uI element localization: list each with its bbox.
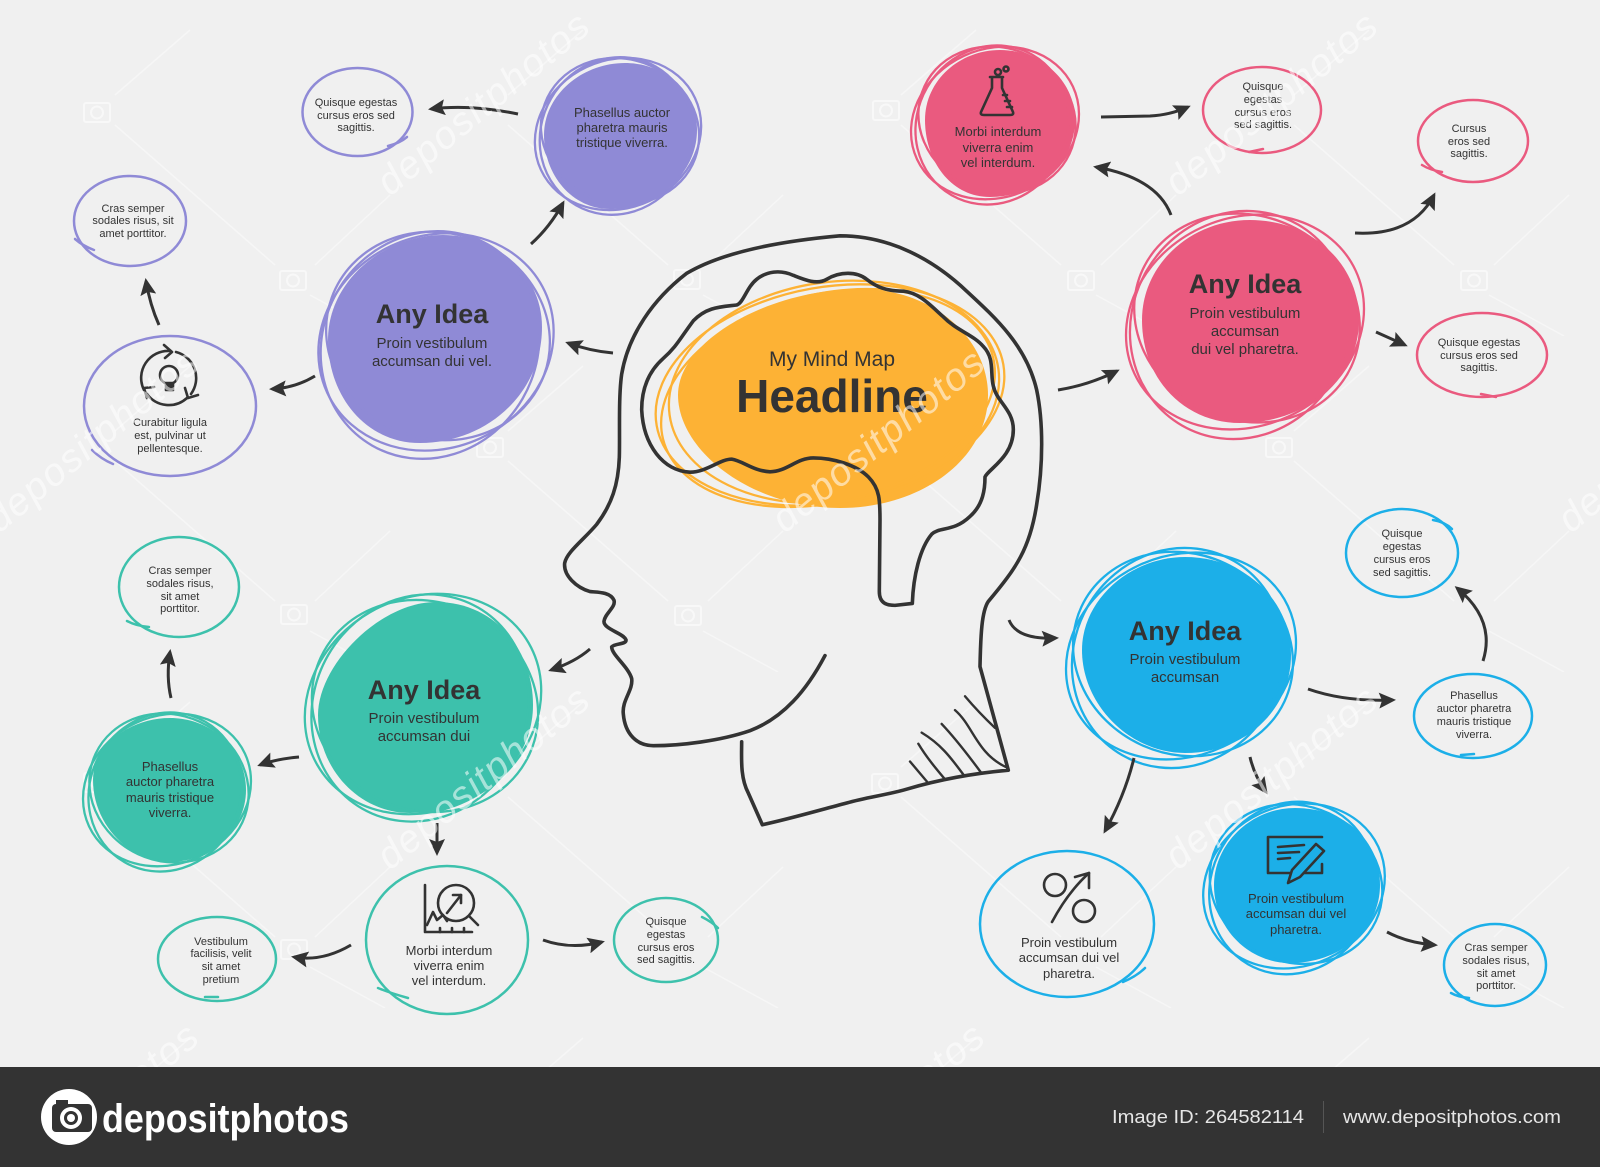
node: Morbi ring with chart icon	[366, 866, 528, 1014]
node: Phasellus filled	[58, 684, 276, 900]
node: Morbi filled with flask: vel interdum.	[961, 155, 1035, 170]
node: Quisque ring	[1203, 67, 1321, 153]
node: Cursus ring: eros sed	[1448, 136, 1490, 148]
arrow: teal idea to Phasellus	[260, 757, 299, 765]
head outline illustration	[565, 236, 1042, 825]
node: Cursus ring: sagittis.	[1450, 148, 1488, 160]
panel: blue branch	[980, 509, 1546, 1006]
main idea: pink: Any Idea	[1189, 269, 1302, 299]
main idea: blue	[1032, 509, 1330, 807]
logo icon: camera in circle	[41, 1089, 97, 1145]
main idea: teal: Proin vestibulum	[369, 710, 479, 727]
watermarks: depositphotos	[1156, 678, 1386, 878]
node: Phasellus filled: viverra.	[149, 805, 191, 820]
icon: note and pen	[1268, 837, 1324, 883]
node: Morbi filled with flask: viverra enim	[963, 140, 1033, 155]
watermarks: depositphotos	[1156, 4, 1386, 204]
main idea: pink: dui vel pharetra.	[1191, 341, 1299, 358]
arrow: Morbi to Quisque	[543, 940, 602, 946]
arrow: purple idea to Phasellus	[531, 203, 563, 244]
node: Vestibulum ring	[158, 917, 276, 1001]
main idea: blue: accumsan	[1151, 669, 1219, 686]
node: Cras ring: amet porttitor.	[99, 228, 167, 240]
node: Phasellus ring: viverra.	[1456, 729, 1492, 741]
arrow: pink idea to lower Quisque	[1376, 332, 1405, 345]
arrow: blue idea to percent ring	[1105, 758, 1134, 831]
node: filled with pen icon: Proin vestibulum	[1248, 891, 1344, 906]
node: Quisque ring: egestas	[647, 929, 686, 941]
arrow: teal idea to Morbi	[436, 823, 438, 853]
node: Phasellus ring: mauris tristique	[1437, 716, 1511, 728]
node: percent ring: pharetra.	[1043, 966, 1095, 981]
node: Vestibulum ring: facilisis, velit	[190, 948, 252, 960]
node: Curabitur ring: est, pulvinar ut	[134, 430, 206, 442]
node: Cras ring: Cras semper	[1465, 942, 1528, 954]
node: Cras ring: Cras semper	[149, 565, 212, 577]
node: Curabitur ring: pellentesque.	[137, 443, 203, 455]
node: Quisque ring: egestas	[1244, 94, 1283, 106]
node: Phasellus filled	[510, 29, 726, 243]
node: Quisque ring: cursus eros	[1235, 107, 1292, 119]
arrow: Phasellus to Quisque	[431, 107, 518, 114]
node: Vestibulum ring: Vestibulum	[194, 936, 248, 948]
node: Quisque ring	[302, 68, 412, 156]
title text: Headline	[736, 370, 928, 422]
node: percent ring: accumsan dui vel	[1019, 950, 1119, 965]
node: Quisque ring: sed sagittis.	[1373, 567, 1431, 579]
node: Phasellus filled: pharetra mauris	[576, 120, 668, 135]
node: Morbi filled with flask: Morbi interdum	[955, 124, 1041, 139]
arrow: head to pink idea	[1058, 371, 1117, 390]
node: Quisque ring: cursus eros	[638, 942, 695, 954]
node: Cras ring: sodales risus, sit	[92, 215, 174, 227]
node: Vestibulum ring: pretium	[203, 974, 239, 986]
node: Cras ring: sodales risus,	[1462, 955, 1530, 967]
node: Cursus ring	[1418, 100, 1528, 182]
arrow: blue idea to Phasellus	[1308, 689, 1393, 700]
node: filled with pen icon: accumsan dui vel	[1246, 906, 1346, 921]
main idea: pink: accumsan	[1211, 323, 1279, 340]
image id: Image ID: 264582114	[1112, 1107, 1304, 1127]
logo wordmark: depositphotos	[102, 1097, 349, 1141]
node: Phasellus ring	[1414, 674, 1532, 758]
main idea: teal: accumsan dui	[378, 728, 470, 745]
footer bar	[0, 1067, 1600, 1167]
arrow: head to blue idea	[1009, 620, 1056, 638]
icon: lightbulb with cycle arrows	[141, 345, 198, 405]
arrow: Phasellus to Quisque	[1457, 588, 1486, 661]
node: Quisque ring lower: sagittis.	[1460, 362, 1498, 374]
icon: flask	[981, 66, 1013, 115]
arrow: Morbi to Vestibulum	[294, 945, 351, 958]
main idea: pink	[1088, 171, 1400, 479]
node: Quisque ring	[614, 898, 718, 982]
arrow: Curabitur to Cras	[146, 281, 159, 325]
arrow: purple idea to Curabitur	[272, 376, 315, 389]
watermarks: depositphotos	[368, 678, 598, 878]
arrow: head to purple idea	[568, 343, 613, 353]
arrow: pen node to Cras	[1387, 932, 1435, 945]
node: percent ring	[980, 851, 1154, 997]
node: Morbi ring with chart icon: vel interdum.	[412, 973, 486, 988]
arrow: blue idea to pen node	[1250, 757, 1266, 792]
arrow: Phasellus to Cras	[168, 652, 171, 698]
node: filled with pen icon	[1176, 771, 1412, 1005]
node: Phasellus filled: auctor pharetra	[126, 774, 215, 789]
website url: www.depositphotos.com	[1342, 1107, 1561, 1127]
node: Quisque ring: sagittis.	[337, 122, 375, 134]
node: Quisque ring	[1346, 509, 1458, 597]
icon: percent with arrow	[1044, 873, 1095, 922]
node: Quisque ring: egestas	[1383, 541, 1422, 553]
arrow: Morbi to Quisque	[1101, 107, 1188, 117]
node: Phasellus ring: Phasellus	[1450, 690, 1498, 702]
main idea: teal	[264, 551, 582, 861]
arrow: pink idea to Cursus	[1355, 195, 1434, 233]
node: Morbi ring with chart icon: viverra enim	[414, 958, 484, 973]
node: Vestibulum ring: sit amet	[202, 961, 240, 973]
node: Quisque ring: cursus eros sed	[317, 110, 395, 122]
node: Cras ring	[119, 537, 239, 637]
node: Phasellus filled: Phasellus	[142, 759, 199, 774]
main idea: purple: Any Idea	[376, 299, 489, 329]
node: Cursus ring: Cursus	[1452, 123, 1487, 135]
node: Quisque ring: sed sagittis.	[637, 954, 695, 966]
node: Quisque ring lower	[1417, 313, 1547, 397]
central topic: orange blob	[638, 256, 1022, 540]
node: Cras ring: sodales risus,	[146, 578, 214, 590]
node: Quisque ring: Quisque egestas	[315, 97, 398, 109]
node: Quisque ring lower: cursus eros sed	[1440, 350, 1518, 362]
main idea: purple: Proin vestibulum	[377, 335, 487, 352]
node: Cras ring: porttitor.	[160, 603, 200, 615]
main idea: blue: Any Idea	[1129, 616, 1242, 646]
node: Phasellus filled: mauris tristique	[126, 790, 214, 805]
main idea: teal: Any Idea	[368, 675, 481, 705]
icon: chart and magnifier	[425, 885, 478, 932]
node: Quisque ring: cursus eros	[1374, 554, 1431, 566]
node: Quisque ring: sed sagittis.	[1234, 119, 1292, 131]
node: filled with pen icon: pharetra.	[1270, 922, 1322, 937]
node: Morbi ring with chart icon: Morbi interdum	[406, 943, 492, 958]
node: Cras ring: Cras semper	[102, 203, 165, 215]
main idea: pink: Proin vestibulum	[1190, 305, 1300, 322]
node: Cras ring	[74, 176, 186, 266]
node: Cras ring	[1444, 924, 1546, 1006]
node: Curabitur ring: Curabitur ligula	[133, 417, 208, 429]
node: Quisque ring: Quisque	[1382, 528, 1422, 540]
node: Phasellus filled: tristique viverra.	[576, 135, 668, 150]
node: Phasellus filled: Phasellus auctor	[574, 105, 671, 120]
panel: teal branch	[58, 537, 718, 1014]
arrow: head to teal idea	[551, 649, 590, 670]
node: Curabitur ring	[84, 336, 256, 476]
node: Phasellus ring: auctor pharetra	[1437, 703, 1512, 715]
panel: pink branch	[886, 17, 1547, 479]
watermarks: depositphotos	[763, 341, 993, 541]
node: Cras ring: sit amet	[161, 591, 199, 603]
title text: My Mind Map	[769, 348, 895, 371]
node: Quisque ring lower: Quisque egestas	[1438, 337, 1521, 349]
watermarks: depositphotos	[368, 4, 598, 204]
node: Quisque ring: Quisque	[646, 916, 686, 928]
node: percent ring: Proin vestibulum	[1021, 935, 1117, 950]
main idea: blue: Proin vestibulum	[1130, 651, 1240, 668]
node: Cras ring: sit amet	[1477, 968, 1515, 980]
arrow: pink idea to Morbi	[1096, 167, 1171, 215]
node: Cras ring: porttitor.	[1476, 980, 1516, 992]
panel: purple branch	[74, 29, 726, 499]
main idea: purple: accumsan dui vel.	[372, 353, 492, 370]
node: Morbi filled with flask	[886, 17, 1104, 233]
node: Quisque ring: Quisque	[1243, 81, 1283, 93]
main idea: purple	[279, 191, 590, 499]
